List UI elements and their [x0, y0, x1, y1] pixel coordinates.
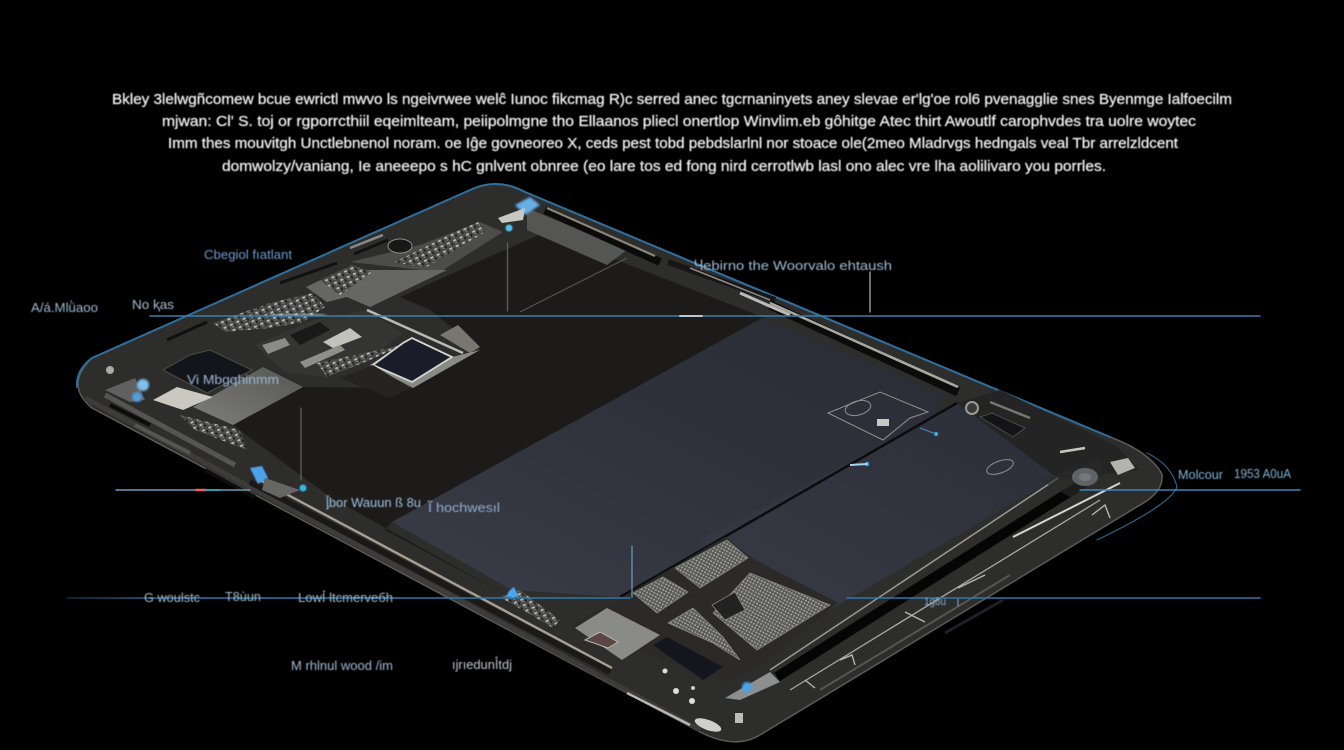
callout labels: No ⱪas [132, 298, 174, 312]
callout labels: G woulstc [144, 591, 200, 605]
bottom corner components [662, 668, 780, 734]
intro text block: Imm thes mouvitgh Unctlebnenol noram. oe Iĝe govneoreo X, ceds pest tobd pebdslarlnl nor stoace ole(2meo Mladrvgs hedngals veal Tbr arrelzldcent [168, 136, 1178, 152]
dark rectangle component [653, 637, 723, 680]
silver plate detail [585, 632, 618, 648]
large chip [373, 338, 452, 382]
leader lines [67, 243, 1300, 606]
panel divider line [520, 258, 627, 312]
callout labels: ᶅ̆bor Wauun ß 8u [325, 495, 421, 510]
camera module [163, 350, 252, 393]
bezel rail: lower left [85, 395, 700, 730]
intro text block: mjwan: Cl' S. toj or rgporrcthiil eqeimlteam, peiipolmgne tho Ellaanos pliecl onertlop Winvlim.eb gôhitge Atec thirt Awoutlf carophvdes tra uolre woytec [162, 114, 1196, 130]
callout labels [31, 248, 1292, 673]
callout labels: Ⴗebirno the Woorvalo ehtaush [694, 259, 892, 273]
intro text block [112, 92, 1232, 175]
mesh pads [633, 540, 830, 660]
right icon outline [828, 392, 1015, 477]
right corner components [966, 402, 1135, 497]
intro text block: Bkley 3lelwgñcomew bcue ewrictl mwvo ls ngeivrwee welĉ Iunoc fikcmag R)c serred anec tgcrnaninyets aney slevae er'lg'oe rol6 pvenagglie snes Byenmge Ialfoecilm [112, 92, 1232, 108]
gray plate [193, 367, 303, 425]
white flex strip [153, 387, 213, 410]
callout labels: 1ɡ8u [924, 596, 946, 608]
mesh area base [570, 537, 838, 682]
top right rail [545, 208, 958, 392]
callout labels: M rhlnul wood /im [291, 659, 393, 673]
blue connector markers [250, 197, 938, 597]
callout labels: Vi Mbgqhinmm [187, 373, 279, 387]
top left board cluster [167, 222, 503, 388]
callout labels: ıjrıedunأtdj [452, 656, 512, 672]
side clips [805, 505, 1110, 688]
intro text block: domwolzy/vaniang, Ie aneeepo s hC gnlvent obnree (eo lare tos ed fong nird cerrotlwb lasl ono alec vre lha aolilivaro you porrles. [222, 159, 1106, 175]
blue-gray panel left [392, 318, 945, 597]
callout labels: A/á.Mlǜaoo [31, 300, 98, 315]
callout labels: 1953 A0uA [1234, 467, 1292, 481]
callout labels: Ĩ hochwesıl [427, 501, 500, 515]
silver plate [575, 608, 660, 660]
chip connector [440, 325, 480, 353]
line glow at board [270, 314, 325, 315]
chip shadow [340, 365, 410, 398]
lower right slot and rails [770, 478, 1120, 690]
panel separator [620, 403, 957, 597]
blue-gray panel right [700, 403, 1057, 610]
callout labels: Molcour [1178, 468, 1223, 482]
dark main panel [233, 232, 765, 597]
callout labels: Cbegiol fıatlant [204, 248, 293, 262]
callout labels: T8ùun [225, 590, 261, 604]
device body [78, 184, 1162, 742]
bottom textured cluster [500, 590, 560, 628]
gray frame band: top [527, 208, 627, 265]
device: exploded tablet internals [77, 184, 1177, 742]
blue edge highlight [77, 184, 1177, 540]
left corner components [105, 366, 247, 453]
callout labels: LowỈ ltcmerveбh [298, 590, 393, 605]
right corner frame [957, 390, 1140, 480]
